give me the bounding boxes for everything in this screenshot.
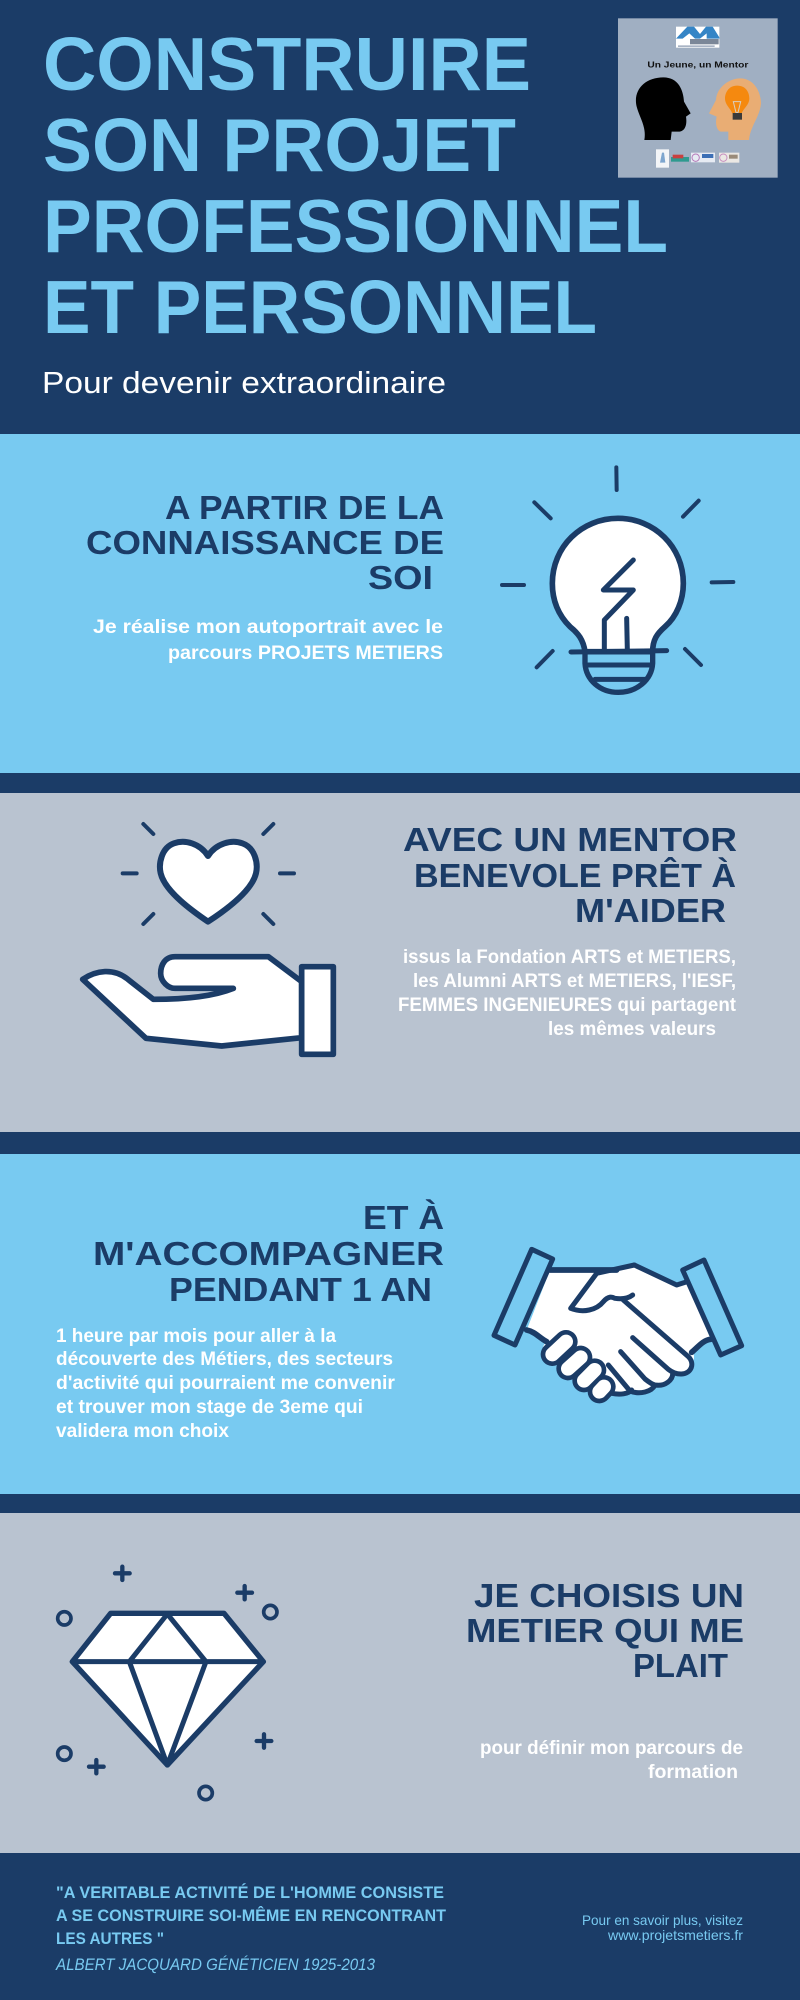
heading: PLAIT — [633, 1647, 728, 1684]
heading: JE CHOISIS UN — [474, 1577, 744, 1614]
body text: formation — [648, 1762, 738, 1783]
body text: parcours PROJETS METIERS — [168, 643, 443, 664]
title: CONSTRUIRE — [43, 22, 531, 106]
website note: Pour en savoir plus, visitez — [582, 1912, 743, 1928]
body text: 1 heure par mois pour aller à la — [56, 1326, 336, 1347]
heading: M'AIDER — [575, 892, 726, 929]
heading: PENDANT 1 AN — [169, 1271, 432, 1308]
icon: orange head with bulb — [709, 78, 761, 140]
heading: ET À — [363, 1199, 444, 1236]
heading: AVEC UN MENTOR — [403, 821, 737, 858]
image card: un jeune, un mentor — [618, 18, 778, 178]
subtitle: Pour devenir extraordinaire — [42, 365, 446, 400]
panel: choix du metier — [0, 1513, 800, 1853]
heading — [403, 821, 737, 929]
body text: FEMMES INGENIEURES qui partagent — [398, 995, 737, 1016]
body text — [56, 1326, 396, 1442]
body text: Je réalise mon autoportrait avec le — [93, 617, 443, 638]
icon: diamond — [58, 1567, 277, 1800]
heading — [93, 1199, 444, 1308]
heading: BENEVOLE PRÊT À — [414, 857, 736, 894]
title: ET PERSONNEL — [43, 265, 597, 349]
website note: www.projetsmetiers.fr — [607, 1927, 743, 1943]
title: PROFESSIONNEL — [43, 184, 668, 268]
quote: "A VERITABLE ACTIVITÉ DE L'HOMME CONSISTE — [56, 1883, 444, 1902]
heading: A PARTIR DE LA — [165, 489, 444, 526]
body text — [398, 947, 737, 1040]
body text: les mêmes valeurs — [548, 1019, 716, 1040]
body text: validera mon choix — [56, 1421, 229, 1442]
icon: hand holding heart — [83, 824, 333, 1054]
icon: light bulb — [502, 467, 733, 692]
panel: header — [0, 0, 800, 434]
title — [43, 22, 668, 349]
quote author: ALBERT JACQUARD GÉNÉTICIEN 1925-2013 — [55, 1955, 375, 1974]
body text: pour définir mon parcours de — [480, 1738, 743, 1759]
card title: Un Jeune, un Mentor — [647, 60, 749, 70]
website note — [582, 1912, 743, 1943]
heading: CONNAISSANCE DE — [86, 524, 444, 561]
quote — [56, 1883, 447, 1948]
panel: mentor benevole — [0, 793, 800, 1132]
body text — [480, 1738, 743, 1783]
quote: LES AUTRES " — [56, 1929, 164, 1948]
heading: SOI — [368, 559, 433, 596]
body text — [93, 617, 443, 664]
body text: découverte des Métiers, des secteurs — [56, 1349, 393, 1370]
panel: connaissance de soi — [0, 434, 800, 773]
partner logos — [656, 149, 739, 168]
body text: et trouver mon stage de 3eme qui — [56, 1397, 363, 1418]
heading: METIER QUI ME — [466, 1612, 744, 1649]
heading: M'ACCOMPAGNER — [93, 1235, 444, 1272]
icon: handshake — [494, 1249, 742, 1398]
quote: A SE CONSTRUIRE SOI-MÊME EN RENCONTRANT — [56, 1906, 447, 1925]
title: SON PROJET — [43, 103, 516, 187]
panel: footer — [0, 1853, 800, 2000]
body text: les Alumni ARTS et METIERS, l'IESF, — [413, 971, 736, 992]
body text: d'activité qui pourraient me convenir — [56, 1373, 396, 1394]
logo: fondation — [676, 27, 719, 48]
body text: issus la Fondation ARTS et METIERS, — [403, 947, 736, 968]
heading — [86, 489, 444, 596]
heading — [466, 1577, 744, 1684]
icon: black head — [636, 77, 691, 140]
panel: accompagnement — [0, 1154, 800, 1494]
